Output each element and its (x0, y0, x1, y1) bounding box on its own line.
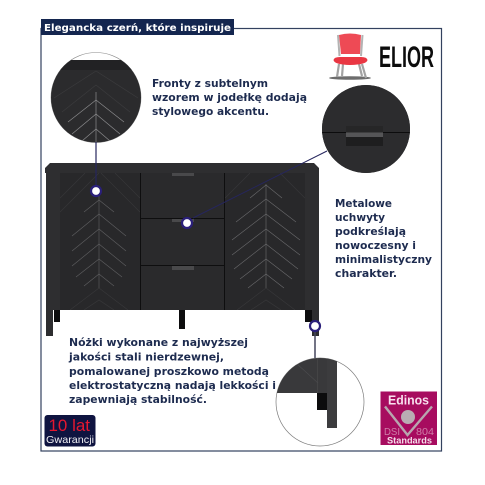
badge: Edinos standards (380, 392, 437, 446)
connector: handle detail to dot (193, 151, 327, 218)
badge: 10-year warranty: 10 lat (48, 417, 90, 435)
text: door pattern: wzorem w jodełkę dodają (152, 92, 307, 104)
sideboard (45, 163, 319, 336)
text: legs (68, 337, 276, 406)
circle: leg detail (276, 358, 364, 446)
text: legs: jakości stali nierdzewnej, (68, 352, 224, 364)
text: door pattern (152, 78, 307, 118)
text: handles: podkreślają (335, 226, 406, 238)
frame (41, 28, 442, 451)
badge: Edinos standards: Edinos (388, 392, 429, 408)
badge: Edinos standards: DSI (384, 427, 400, 438)
badge: 10-year warranty (44, 415, 96, 446)
text: legs: elektrostatyczną nadają lekkości i (69, 380, 276, 392)
text: door pattern: stylowego akcentu. (152, 106, 269, 118)
connector: door detail to dot (95, 142, 97, 190)
connector: leg dot to leg detail (314, 330, 316, 358)
handles (172, 173, 194, 176)
badge: Edinos standards: 804 (416, 427, 434, 438)
marker: handle (182, 218, 192, 228)
text: handles: minimalistyczny (335, 254, 432, 266)
sideboard body (45, 163, 319, 310)
circle: handle detail (322, 85, 410, 173)
marker: door (91, 186, 101, 196)
text: handles (335, 198, 432, 280)
text: handles: nowoczesny i (335, 240, 416, 252)
text: legs: Nóżki wykonane z najwyższej (69, 337, 248, 349)
left door (60, 173, 140, 310)
icon: red chair (329, 34, 371, 80)
text: handles: Metalowe (335, 198, 392, 210)
badge: Edinos standards: Standards (387, 436, 432, 446)
legs (46, 310, 319, 336)
drawers (140, 173, 224, 310)
title: Elegancka czerń, które inspiruje (44, 22, 231, 34)
logo wordmark: ELIOR (379, 41, 434, 74)
text: legs: zapewniają stabilność. (69, 394, 207, 406)
logo: Elior (329, 34, 434, 80)
text: legs: pomalowanej proszkowo metodą (69, 366, 269, 378)
circle: door pattern detail (51, 52, 141, 145)
marker: leg (310, 321, 320, 331)
title (41, 19, 234, 35)
text: handles: charakter. (335, 268, 397, 280)
badge: 10-year warranty: Gwarancji (46, 434, 94, 446)
right door (225, 173, 305, 310)
text: handles: uchwyty (335, 212, 385, 224)
text: door pattern: Fronty z subtelnym (152, 78, 268, 90)
